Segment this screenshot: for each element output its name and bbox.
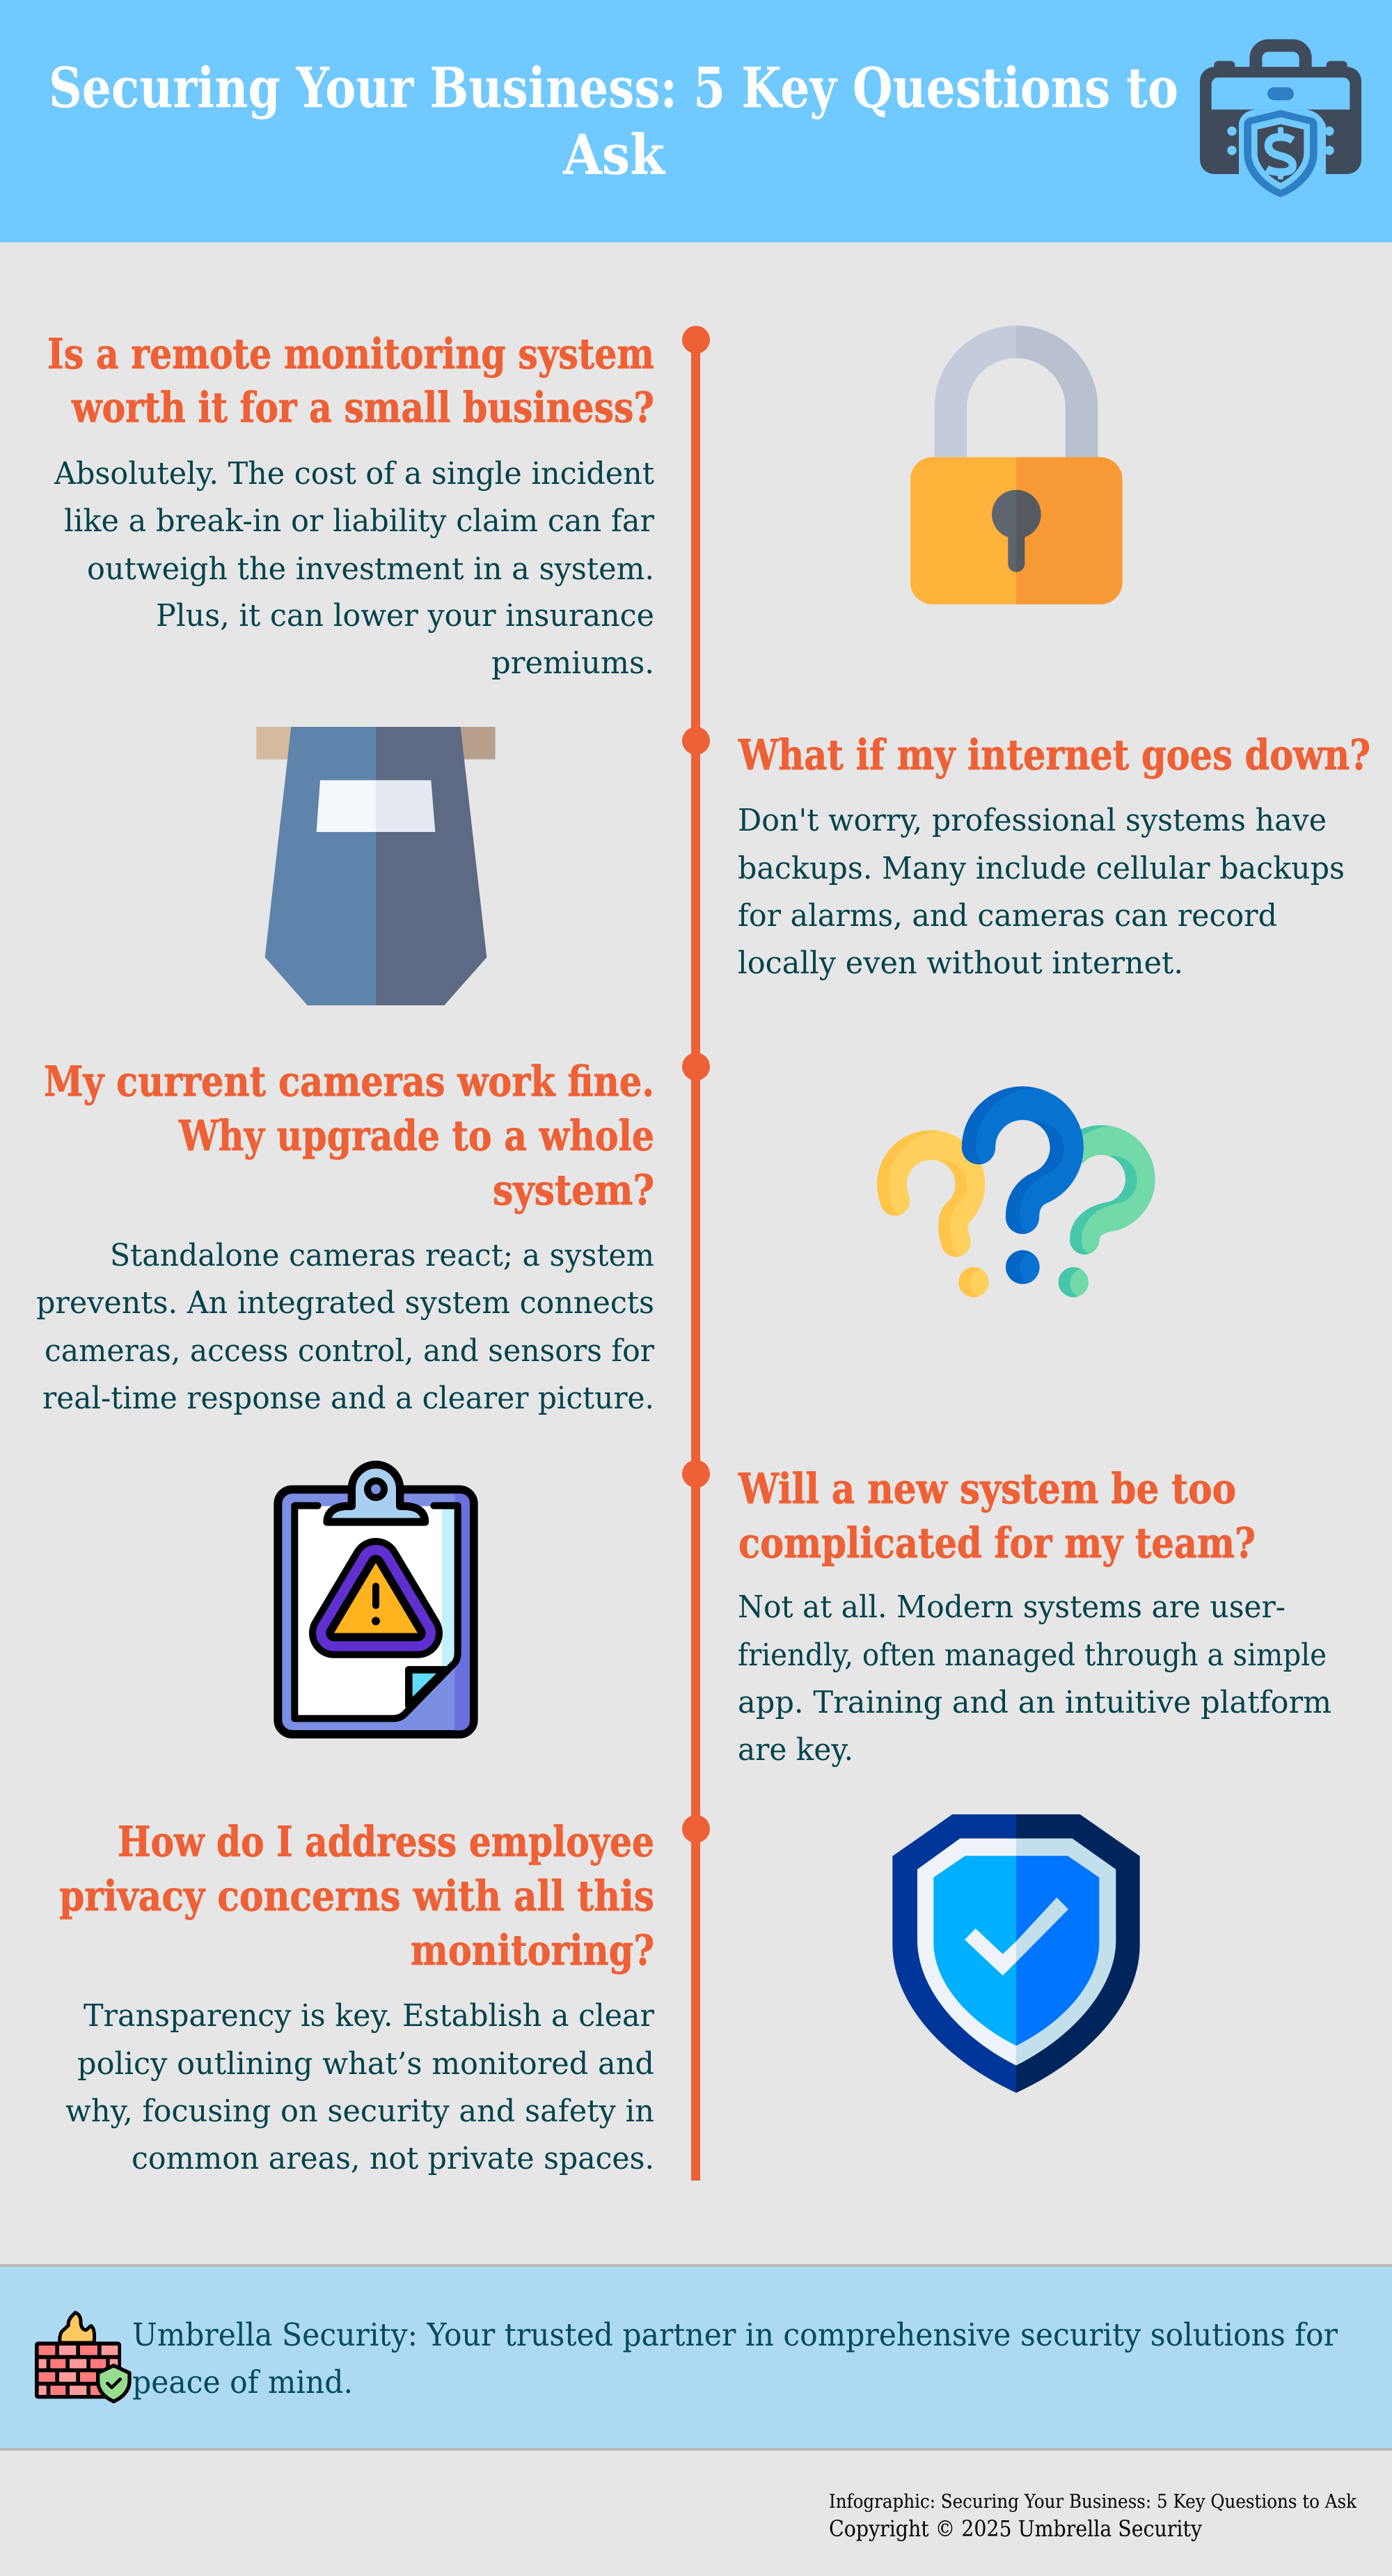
footer credits [829, 2491, 1357, 2542]
panel: question 5 [59, 1818, 655, 2176]
icon: shield with check mark [892, 1814, 1140, 2093]
title [49, 55, 1178, 187]
timeline dot 2 [682, 727, 710, 755]
timeline line [682, 326, 710, 2181]
text: answer 1: like a break-in or liability claim can far [64, 503, 655, 539]
text: answer 3 [36, 1238, 655, 1416]
heading: question 5 [59, 1818, 654, 1975]
text: answer 4: friendly, often managed through a simple [738, 1638, 1327, 1673]
heading: question 5: monitoring? [411, 1926, 654, 1975]
footer credits: Copyright © 2025 Umbrella Security [829, 2515, 1202, 2542]
text: answer 4: are key. [738, 1732, 853, 1768]
text: answer 5: common areas, not private spaces. [132, 2141, 654, 2176]
text: answer 3: prevents. An integrated system connects [36, 1285, 654, 1321]
timeline dot 1 [682, 326, 710, 354]
title: Securing Your Business: 5 Key Questions to [49, 55, 1178, 120]
heading: question 3 [44, 1058, 654, 1215]
heading: question 1: Is a remote monitoring system [47, 330, 654, 379]
title: Ask [562, 122, 665, 187]
text: answer 2: Don't worry, professional systems have [738, 803, 1327, 838]
text: answer 3: cameras, access control, and sensors for [45, 1333, 655, 1369]
heading: question 3: My current cameras work fine. [44, 1058, 654, 1106]
heading: question 1: worth it for a small business? [71, 384, 654, 432]
text: answer 1: Absolutely. The cost of a single incident [54, 456, 654, 492]
panel: question 2 [738, 731, 1370, 981]
text: answer 5: policy outlining what’s monitored and [77, 2046, 654, 2082]
icon: apron / uniform vest [256, 727, 496, 1005]
text: answer 1: Plus, it can lower your insurance [156, 598, 654, 634]
text: answer 5: why, focusing on security and safety in [65, 2094, 654, 2129]
text: answer 1: premiums. [491, 645, 654, 681]
heading: question 5: How do I address employee [118, 1818, 654, 1867]
text: answer 2: for alarms, and cameras can record [738, 898, 1277, 934]
icon: padlock [910, 342, 1123, 604]
text: answer 1: outweigh the investment in a system. [87, 551, 654, 587]
text: closing statement: peace of mind. [132, 2364, 353, 2401]
heading: question 4: Will a new system be too [738, 1465, 1236, 1514]
timeline dot 3 [682, 1053, 710, 1081]
timeline dot 4 [682, 1460, 710, 1488]
heading: question 4: complicated for my team? [738, 1519, 1256, 1568]
text: closing statement [132, 2316, 1338, 2401]
icon: clipboard with warning triangle [278, 1465, 474, 1734]
panel: question 3 [36, 1058, 655, 1416]
timeline dot 5 [682, 1815, 710, 1843]
icon: three question marks [877, 1086, 1155, 1298]
panel: closing banner [0, 2264, 1392, 2451]
icon: briefcase with dollar shield [1200, 45, 1361, 204]
text: answer 5 [65, 1998, 655, 2176]
heading: question 3: system? [493, 1166, 654, 1215]
text: answer 2 [738, 803, 1345, 981]
text: answer 5: Transparency is key. Establish a clear [84, 1998, 655, 2034]
heading: question 1 [47, 330, 654, 432]
header band [0, 0, 1392, 242]
footer credits: Infographic: Securing Your Business: 5 Key Questions to Ask [829, 2491, 1357, 2513]
panel: question 1 [47, 330, 655, 681]
heading: question 3: Why upgrade to a whole [178, 1112, 654, 1161]
heading: question 4 [738, 1465, 1256, 1568]
text: answer 2: locally even without internet. [738, 945, 1183, 981]
text: answer 3: Standalone cameras react; a system [110, 1238, 654, 1273]
text: answer 2: backups. Many include cellular backups [738, 851, 1345, 886]
icon: firewall with flame and shield [35, 2313, 129, 2401]
text: answer 1 [54, 456, 655, 681]
text: answer 4 [738, 1589, 1331, 1768]
panel: question 4 [738, 1465, 1331, 1768]
text: answer 4: app. Training and an intuitive platform [738, 1685, 1331, 1720]
heading: question 5: privacy concerns with all this [59, 1872, 654, 1921]
text: closing statement: Umbrella Security: Your trusted partner in comprehensive security solutions for [132, 2316, 1338, 2353]
text: answer 3: real-time response and a clearer picture. [42, 1381, 654, 1416]
text: answer 4: Not at all. Modern systems are user- [738, 1589, 1286, 1625]
